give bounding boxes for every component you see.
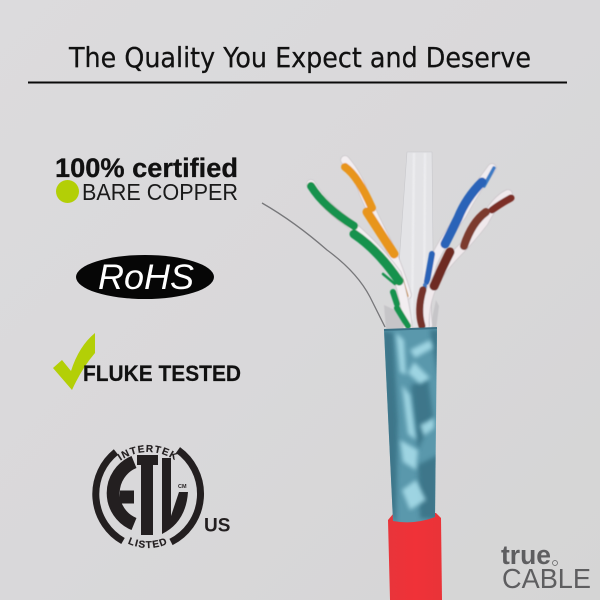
CM mark: CM <box>178 484 187 490</box>
foil base <box>384 329 437 522</box>
Fluke tested label: FLUKE TESTED <box>83 361 241 386</box>
RoHS text: RoHS <box>98 258 194 297</box>
bare copper label: BARE COPPER <box>82 179 238 205</box>
green pair <box>311 184 408 327</box>
foil wrap above shield <box>384 300 439 330</box>
red jacket <box>388 513 442 600</box>
logo word true: true <box>501 540 551 570</box>
logo word CABLE: CABLE <box>502 563 591 594</box>
badge: 100% certified bare copper <box>55 153 238 205</box>
certified heading: 100% certified <box>55 153 238 183</box>
letter E <box>113 462 134 524</box>
foil shadows <box>382 330 440 525</box>
US mark: US <box>204 516 230 536</box>
title underline <box>28 82 567 84</box>
drain wire <box>262 203 385 327</box>
orange pair <box>345 160 407 296</box>
foil top rim <box>384 328 437 330</box>
RoHS ellipse <box>76 255 214 299</box>
foil shield <box>384 329 437 522</box>
logo registered mark <box>552 560 558 566</box>
foil highlights <box>396 333 434 510</box>
icon: check mark <box>53 333 95 390</box>
badge: ETL listed <box>92 444 230 548</box>
cable photo <box>262 152 511 600</box>
outer ring left arc <box>96 452 123 541</box>
title: The Quality You Expect and Deserve <box>68 41 531 74</box>
LISTED arc text: LISTED <box>128 537 166 548</box>
brown pair <box>420 194 511 326</box>
blue pair <box>425 168 494 325</box>
outer ring right arc <box>171 450 201 542</box>
letter L <box>162 458 188 534</box>
badge: Fluke tested <box>53 333 241 390</box>
letter T <box>137 455 158 535</box>
clear film <box>400 152 433 328</box>
icon: green dot <box>56 180 79 203</box>
logo: trueCABLE <box>501 540 591 594</box>
badge: RoHS <box>76 255 214 299</box>
film highlight <box>412 153 425 320</box>
INTERTEK arc text: INTERTEK <box>118 444 178 460</box>
